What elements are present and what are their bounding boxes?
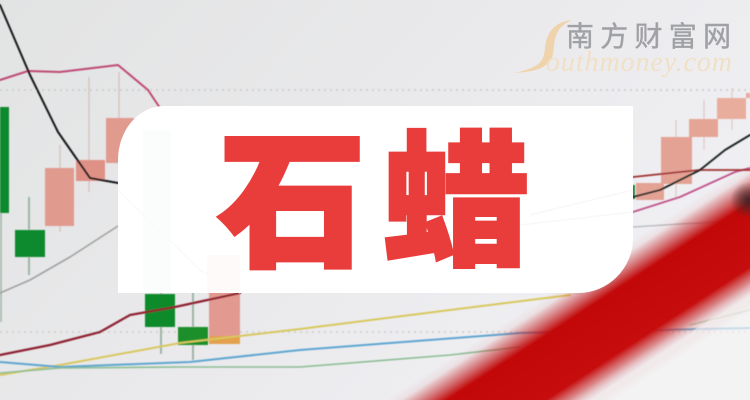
white title panel [118,106,633,293]
pen white halo below [590,292,750,400]
candlesticks: red [45,72,750,344]
logo latin name: outhmoney.com [546,47,732,78]
title character 石: 石 [219,122,365,285]
title text [219,122,529,285]
logo chinese name: 南方财富网 [566,15,731,55]
candlesticks: green [0,107,635,360]
panel faint chart remnants [118,130,633,293]
logo swoosh S [513,20,572,73]
title character 蜡: 蜡 [383,122,529,285]
logo: southmoney [513,15,732,78]
pen dark tip [728,182,750,218]
grid dotted lines [0,90,750,332]
